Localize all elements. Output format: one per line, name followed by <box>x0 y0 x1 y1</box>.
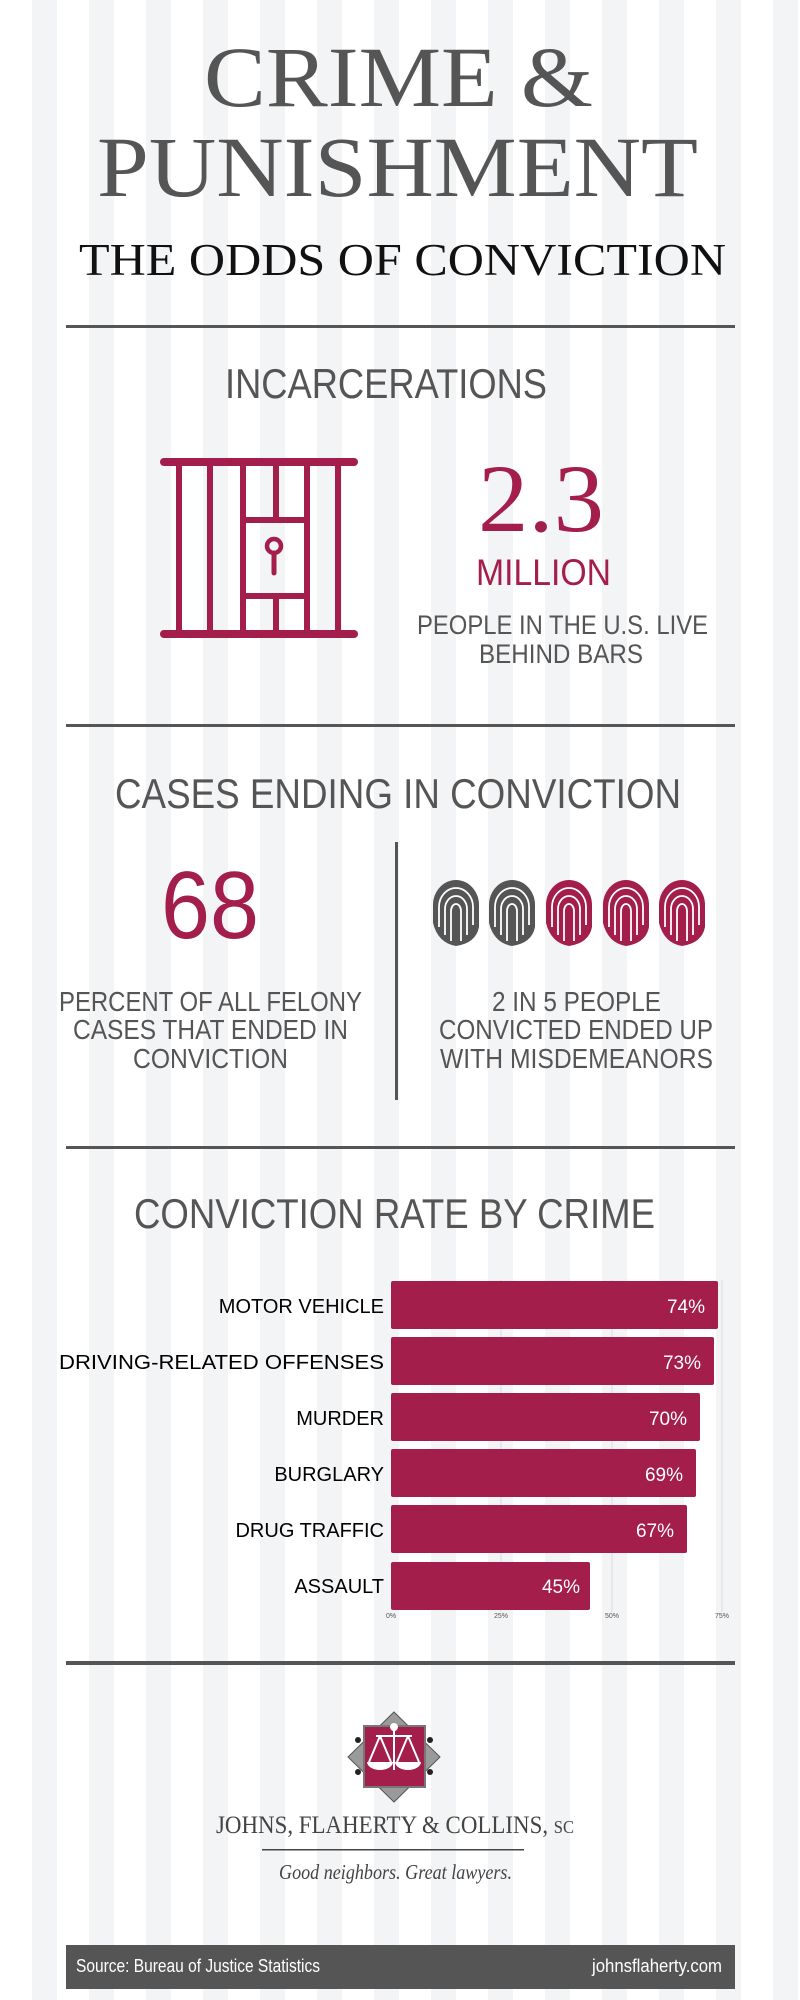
bar chart: MOTOR VEHICLE <box>219 1296 384 1318</box>
stat: 68 percent: CASES THAT ENDED IN <box>73 1014 348 1045</box>
bar chart: 67% <box>636 1521 674 1542</box>
title <box>97 29 698 215</box>
icon: jail bars <box>164 462 354 634</box>
title: CRIME & <box>204 29 593 125</box>
footer: Source: Bureau of Justice Statistics <box>76 1956 320 1976</box>
bar chart: 74% <box>667 1297 705 1318</box>
firm name: JOHNS, FLAHERTY & COLLINS, SC <box>216 1812 574 1839</box>
text: 2 in 5 misdemeanors: CONVICTED ENDED UP <box>439 1014 713 1045</box>
text: 2 in 5 misdemeanors <box>439 986 713 1074</box>
text: 2 in 5 misdemeanors: 2 IN 5 PEOPLE <box>492 986 661 1017</box>
stat: 2.3 million: 2.3 <box>478 445 604 552</box>
heading: incarcerations: INCARCERATIONS <box>225 360 547 407</box>
bar chart: 0% <box>386 1613 396 1620</box>
stat: 68 percent: PERCENT OF ALL FELONY <box>59 986 362 1017</box>
stat: 68 percent <box>59 852 362 1074</box>
text: 2 in 5 misdemeanors: WITH MISDEMEANORS <box>440 1043 713 1074</box>
bar chart: 75% <box>715 1613 729 1620</box>
heading: conviction rate by crime: CONVICTION RATE BY CRIME <box>134 1190 655 1237</box>
bar chart: DRUG TRAFFIC <box>235 1520 384 1542</box>
logo <box>348 1712 440 1802</box>
bar chart: 45% <box>542 1577 580 1598</box>
bar chart: MURDER <box>296 1408 384 1430</box>
bar chart: 25% <box>494 1613 508 1620</box>
stat: 2.3 million: PEOPLE IN THE U.S. LIVE <box>417 610 708 640</box>
icon: fingerprints <box>433 880 705 946</box>
footer: johnsflaherty.com <box>591 1956 722 1976</box>
bar chart: DRIVING-RELATED OFFENSES <box>59 1352 384 1374</box>
bar chart: BURGLARY <box>274 1464 384 1486</box>
bar chart: 50% <box>605 1613 619 1620</box>
stat: 68 percent: 68 <box>161 852 259 959</box>
bar chart: ASSAULT <box>294 1576 384 1598</box>
stat: 2.3 million: BEHIND BARS <box>479 639 643 669</box>
stat: 2.3 million: MILLION <box>476 552 611 593</box>
footer <box>66 1945 735 1989</box>
bar chart: 69% <box>645 1465 683 1486</box>
bar chart <box>59 1280 729 1620</box>
heading: cases ending in conviction: CASES ENDING IN CONVICTION <box>115 770 681 817</box>
subtitle: THE ODDS OF CONVICTION <box>79 235 726 285</box>
stat: 68 percent: CONVICTION <box>133 1043 288 1074</box>
tagline: Good neighbors. Great lawyers. <box>279 1860 512 1884</box>
stat: 2.3 million <box>417 445 708 669</box>
title: PUNISHMENT <box>97 119 698 215</box>
bar chart: 70% <box>649 1409 687 1430</box>
bar chart: 73% <box>663 1353 701 1374</box>
